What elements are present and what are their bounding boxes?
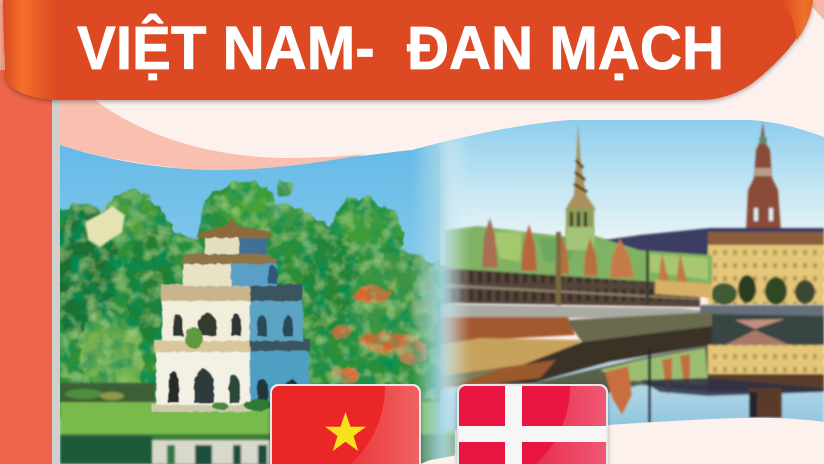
flag gloss — [525, 386, 606, 464]
photo: Copenhagen, Denmark — [440, 110, 824, 430]
photo: Hoan Kiem lake, Vietnam — [50, 130, 455, 464]
left side strip — [0, 0, 60, 464]
shrubs — [60, 383, 155, 405]
banner shape — [3, 0, 813, 100]
Borsen spire — [565, 122, 596, 236]
lawn and lake — [60, 402, 455, 464]
pink swoosh — [60, 100, 365, 170]
flag: Denmark — [457, 384, 608, 464]
trees — [50, 180, 450, 415]
fade between the two photos — [412, 130, 470, 464]
flag cross — [459, 386, 606, 464]
Christiansborg tower — [746, 122, 781, 232]
Turtle Tower — [152, 218, 310, 412]
tower reflection — [152, 440, 270, 464]
banner right fold — [782, 0, 813, 40]
Borsen roof and wall — [445, 218, 712, 307]
title text: VIỆT NAM- ĐAN MẠCH — [77, 14, 724, 82]
banner left fold — [3, 0, 58, 100]
photo: landmarks of Vietnam and Denmark — [50, 110, 824, 464]
flag: Vietnam — [270, 384, 421, 464]
distant building — [85, 206, 125, 247]
quay and canal — [440, 304, 824, 430]
arches — [173, 314, 183, 336]
Christiansborg palace — [605, 228, 824, 305]
title banner — [3, 0, 813, 100]
flag gloss — [340, 386, 419, 464]
flag star — [325, 412, 366, 451]
top right pink corner — [806, 0, 824, 20]
